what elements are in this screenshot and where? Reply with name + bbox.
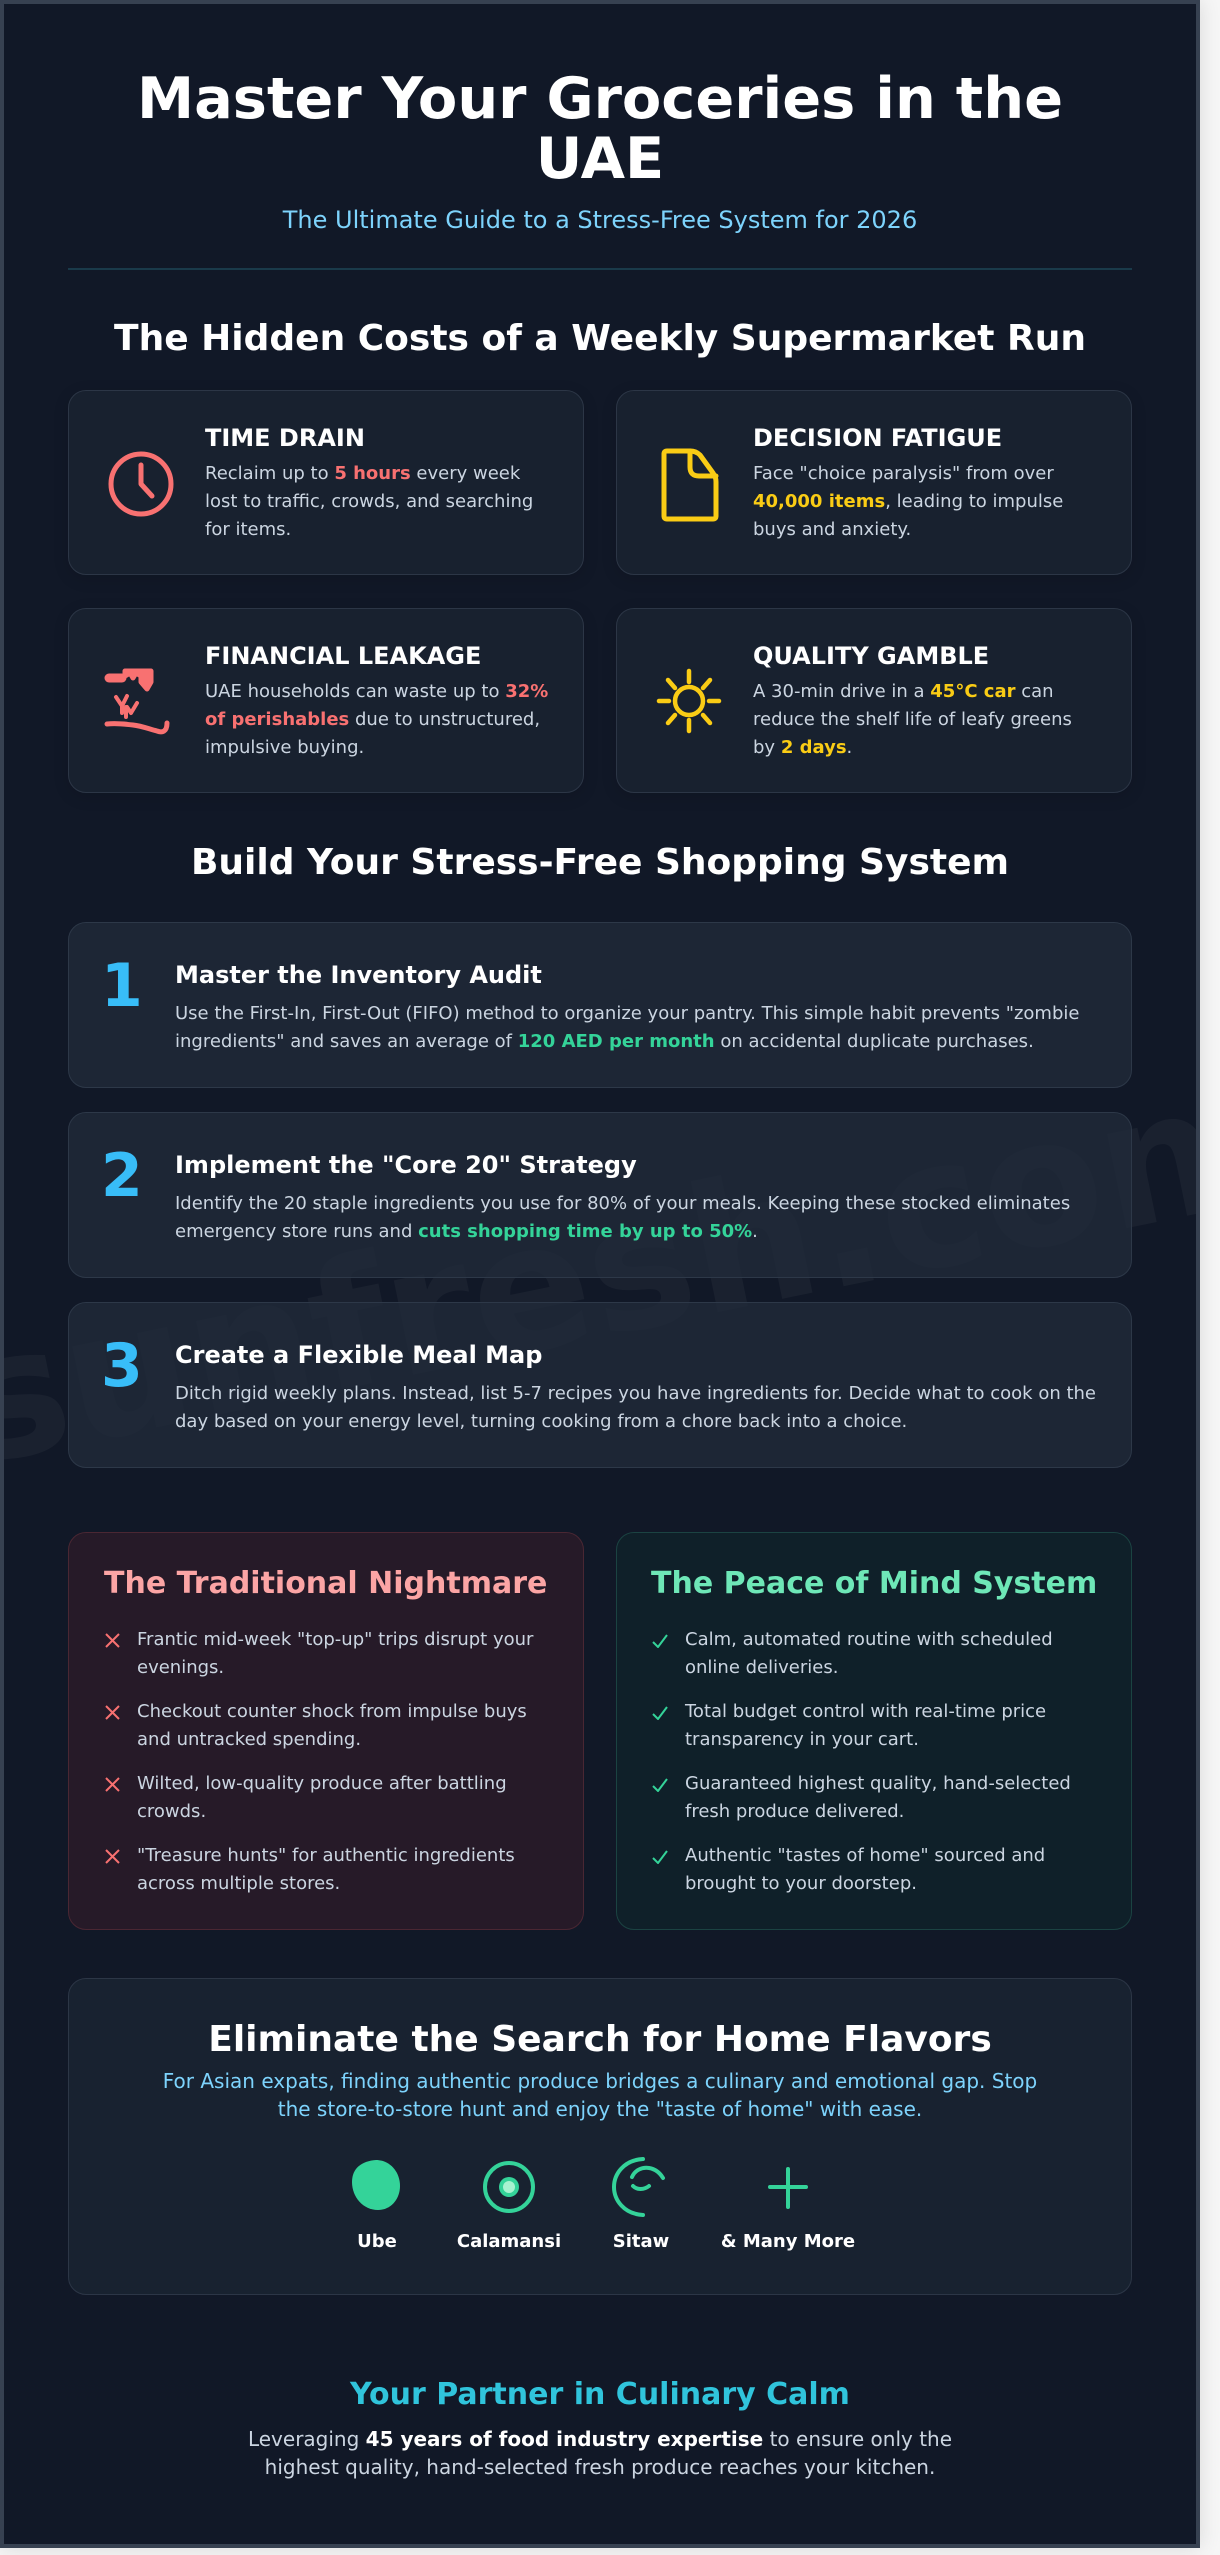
step title: Create a Flexible Meal Map bbox=[175, 1341, 542, 1369]
card text: by 2 days. bbox=[753, 737, 852, 758]
card text: lost to traffic, crowds, and searching bbox=[205, 491, 533, 512]
card title: FINANCIAL LEAKAGE bbox=[205, 642, 481, 670]
list item 3: Wilted, low-quality produce after battling bbox=[137, 1773, 507, 1794]
label: ube: Ube bbox=[357, 2231, 397, 2252]
label: sitaw: Sitaw bbox=[613, 2231, 669, 2252]
list item 1 bbox=[137, 1629, 534, 1678]
check icon bbox=[652, 1706, 668, 1720]
panel heading: The Peace of Mind System bbox=[651, 1566, 1097, 1601]
list item 1: online deliveries. bbox=[685, 1657, 838, 1678]
title: UAE bbox=[536, 125, 664, 192]
footer heading: Your Partner in Culinary Calm bbox=[350, 2377, 850, 2412]
card text: UAE households can waste up to 32% bbox=[205, 681, 548, 702]
heading: system: Build Your Stress-Free Shopping System bbox=[191, 842, 1009, 883]
step text: Identify the 20 staple ingredients you use for 80% of your meals. Keeping these stocked eliminates bbox=[175, 1193, 1070, 1214]
step number: 2 bbox=[101, 1141, 143, 1211]
list item 2: and untracked spending. bbox=[137, 1729, 361, 1750]
panel: financial leakage bbox=[68, 608, 584, 793]
list item 4 bbox=[685, 1845, 1045, 1894]
list item 1: Frantic mid-week "top-up" trips disrupt your bbox=[137, 1629, 533, 1650]
icon: clock bbox=[108, 452, 174, 516]
heading: hidden costs: The Hidden Costs of a Weekly Supermarket Run bbox=[114, 318, 1086, 359]
icon: calamansi bbox=[483, 2161, 535, 2213]
panel: step 3 bbox=[68, 1302, 1132, 1468]
step title: Implement the "Core 20" Strategy bbox=[175, 1151, 637, 1179]
card text: buys and anxiety. bbox=[753, 519, 911, 540]
banner heading: Eliminate the Search for Home Flavors bbox=[208, 2019, 992, 2060]
label: calamansi: Calamansi bbox=[457, 2231, 561, 2252]
card text: reduce the shelf life of leafy greens bbox=[753, 709, 1072, 730]
list item 3: fresh produce delivered. bbox=[685, 1801, 904, 1822]
list item 3 bbox=[137, 1773, 507, 1822]
step text bbox=[175, 1383, 1096, 1432]
icon: document bbox=[662, 448, 718, 522]
card text: of perishables due to unstructured, bbox=[205, 709, 540, 730]
check icon bbox=[652, 1634, 668, 1648]
panel: step 2 bbox=[68, 1112, 1132, 1278]
panel: time drain bbox=[68, 390, 584, 575]
footer text: highest quality, hand-selected fresh produce reaches your kitchen. bbox=[265, 2455, 935, 2479]
cross icon bbox=[105, 1849, 120, 1864]
step text: emergency store runs and cuts shopping time by up to 50%. bbox=[175, 1221, 758, 1242]
step text: day based on your energy level, turning cooking from a chore back into a choice. bbox=[175, 1411, 907, 1432]
banner text: For Asian expats, finding authentic produce bridges a culinary and emotional gap. Stop bbox=[163, 2069, 1037, 2093]
list item 4: Authentic "tastes of home" sourced and bbox=[685, 1845, 1045, 1866]
step title: Master the Inventory Audit bbox=[175, 961, 542, 989]
check icon bbox=[652, 1778, 668, 1792]
list item 1 bbox=[685, 1629, 1053, 1678]
card text bbox=[753, 463, 1063, 540]
cross icon bbox=[105, 1633, 120, 1648]
panel: decision fatigue bbox=[616, 390, 1132, 575]
footer text bbox=[248, 2427, 952, 2479]
icon: ube bbox=[352, 2160, 400, 2210]
panel heading: The Traditional Nightmare bbox=[104, 1566, 547, 1601]
card title: QUALITY GAMBLE bbox=[753, 642, 989, 670]
list item 2 bbox=[137, 1701, 527, 1750]
icon: sun bbox=[656, 668, 722, 734]
list item 4 bbox=[137, 1845, 515, 1894]
step text bbox=[175, 1193, 1070, 1242]
card text bbox=[205, 463, 533, 540]
card text: for items. bbox=[205, 519, 291, 540]
list item 2: Checkout counter shock from impulse buys bbox=[137, 1701, 527, 1722]
subtitle: The Ultimate Guide to a Stress-Free System for 2026 bbox=[283, 206, 917, 234]
step number: 1 bbox=[101, 951, 143, 1021]
step text: Ditch rigid weekly plans. Instead, list 5-7 recipes you have ingredients for. Decide what to cook on the bbox=[175, 1383, 1096, 1404]
icon: sitaw bbox=[612, 2157, 666, 2217]
banner text: the store-to-store hunt and enjoy the "taste of home" with ease. bbox=[278, 2097, 922, 2121]
panel: traditional nightmare bbox=[68, 1532, 584, 1930]
card text bbox=[753, 681, 1072, 758]
list item 4: "Treasure hunts" for authentic ingredients bbox=[137, 1845, 515, 1866]
check icon bbox=[652, 1850, 668, 1864]
cross icon bbox=[105, 1705, 120, 1720]
panel: home flavors banner bbox=[68, 1978, 1132, 2295]
list item 4: across multiple stores. bbox=[137, 1873, 340, 1894]
icon: plus bbox=[768, 2167, 808, 2209]
list item 1: evenings. bbox=[137, 1657, 224, 1678]
step text: ingredients" and saves an average of 120 AED per month on accidental duplicate purchases. bbox=[175, 1031, 1034, 1052]
list item 3 bbox=[685, 1773, 1071, 1822]
list item 2: Total budget control with real-time price bbox=[685, 1701, 1046, 1722]
card text bbox=[205, 681, 548, 758]
title bbox=[137, 65, 1063, 192]
step number: 3 bbox=[101, 1331, 143, 1401]
list item 1: Calm, automated routine with scheduled bbox=[685, 1629, 1053, 1650]
panel: peace of mind bbox=[616, 1532, 1132, 1930]
list item 2: transparency in your cart. bbox=[685, 1729, 919, 1750]
card text: Face "choice paralysis" from over bbox=[753, 463, 1054, 484]
label: many more: & Many More bbox=[721, 2231, 855, 2252]
footer text: Leveraging 45 years of food industry expertise to ensure only the bbox=[248, 2427, 952, 2451]
list item 3: Guaranteed highest quality, hand-selected bbox=[685, 1773, 1071, 1794]
cross icon bbox=[105, 1777, 120, 1792]
step text: Use the First-In, First-Out (FIFO) method to organize your pantry. This simple habit prevents "zombie bbox=[175, 1003, 1079, 1024]
card text: impulsive buying. bbox=[205, 737, 364, 758]
icon: leaking money bbox=[104, 668, 170, 734]
card text: A 30-min drive in a 45°C car can bbox=[753, 681, 1054, 702]
list item 2 bbox=[684, 1701, 1046, 1750]
card text: Reclaim up to 5 hours every week bbox=[205, 463, 520, 484]
list item 3: crowds. bbox=[137, 1801, 206, 1822]
list item 4: brought to your doorstep. bbox=[685, 1873, 917, 1894]
card text: 40,000 items, leading to impulse bbox=[753, 491, 1063, 512]
title: Master Your Groceries in the bbox=[137, 65, 1063, 132]
panel: step 1 bbox=[68, 922, 1132, 1088]
banner text bbox=[163, 2069, 1037, 2121]
panel: quality gamble bbox=[616, 608, 1132, 793]
card title: DECISION FATIGUE bbox=[753, 424, 1002, 452]
step text bbox=[175, 1003, 1079, 1052]
card title: TIME DRAIN bbox=[205, 424, 365, 452]
